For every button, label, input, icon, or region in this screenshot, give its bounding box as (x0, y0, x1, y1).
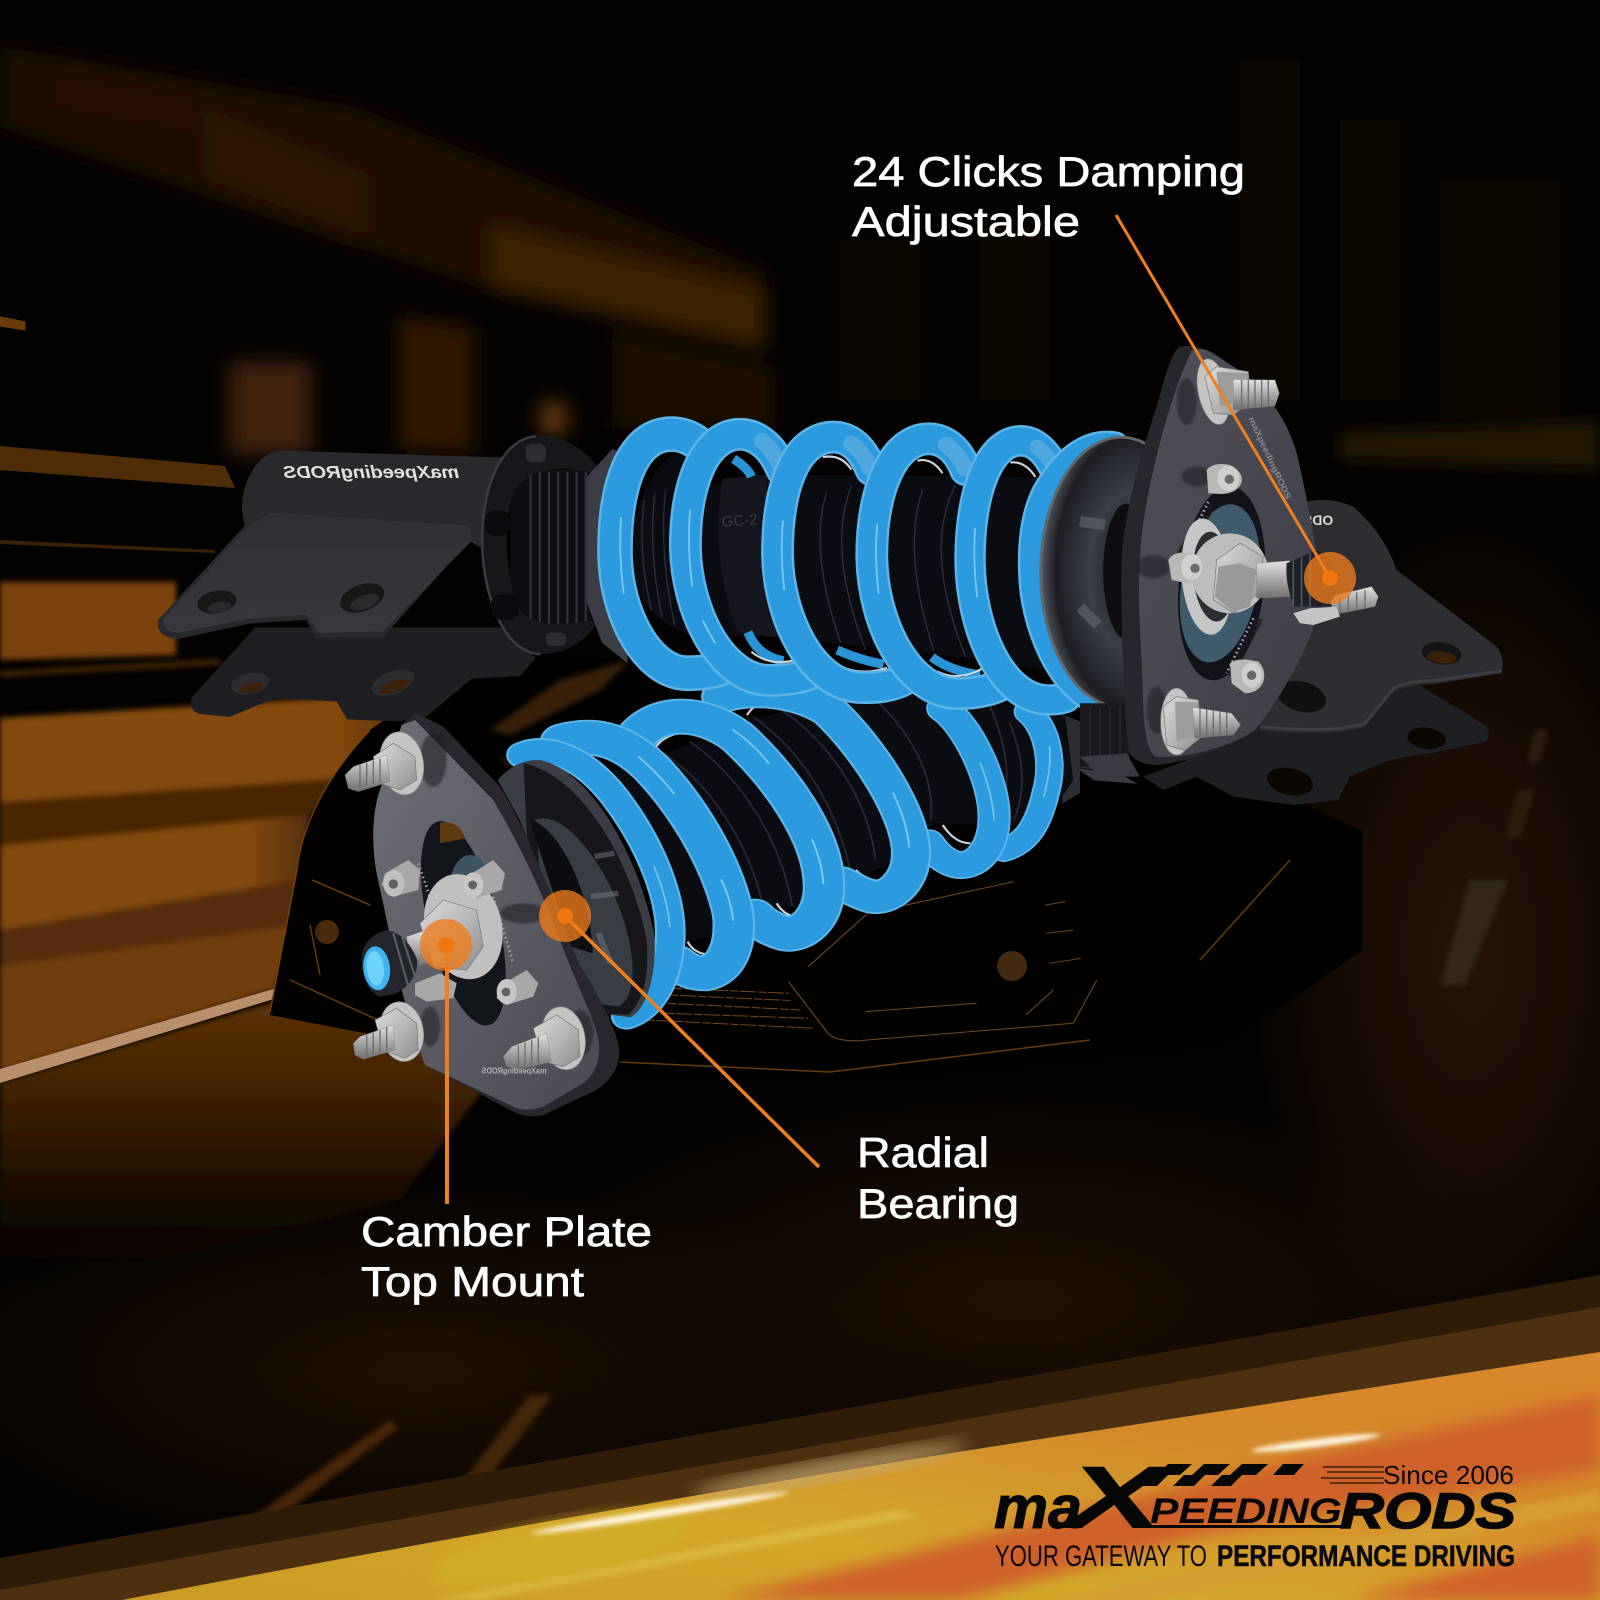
callout: camber plate top mount (361, 919, 652, 1305)
logo: tagline: PERFORMANCE DRIVING (1217, 1540, 1515, 1573)
upper spring coils (615, 434, 1123, 707)
center opening (1169, 482, 1274, 685)
upper coilover assembly (158, 346, 1378, 1116)
lower shock body (614, 693, 1073, 943)
car front grille stripes (646, 988, 814, 1028)
plate body (373, 713, 619, 1116)
large stud top (1192, 356, 1279, 427)
car left headlight outline (270, 730, 1290, 1072)
upper bracket lower flange (191, 628, 536, 721)
lower coilover assembly (rear) (498, 500, 1503, 1017)
threaded shock body (510, 469, 607, 628)
callout: radial bearing (539, 890, 1019, 1227)
lower spring threaded end near right plate (1080, 703, 1140, 777)
label: radial bearing: Radial (857, 1129, 989, 1176)
lower spring and shock body (498, 691, 1073, 1017)
small logo on plate: maXpeedingRODS (1246, 415, 1294, 501)
upper bracket (158, 436, 628, 721)
car outline details (788, 882, 1097, 1041)
bottom orange swoosh band (0, 1275, 1600, 1600)
logo: since 2006: Since 2006 (1383, 1460, 1514, 1490)
right side lower bracket (1143, 500, 1503, 805)
large stud bottom left (353, 998, 428, 1065)
large stud bottom right (503, 1003, 590, 1073)
left camber plate top mount (345, 713, 619, 1116)
plate bolt shadows (1137, 378, 1212, 733)
background: road surface left (0, 582, 520, 1300)
spherical bearing and nut (1177, 516, 1237, 637)
leader line and marker: camber plate (420, 919, 472, 1204)
upper shock body and spring (615, 434, 1201, 707)
plate bolt shadows (420, 733, 593, 1057)
car silhouette (270, 650, 1362, 1082)
background: stripe details left (0, 316, 235, 553)
logo: wordmark: RODS (1340, 1483, 1516, 1539)
back coil segments (734, 459, 980, 675)
background: light streaks (150, 1395, 552, 1600)
spring seat disc (1041, 437, 1201, 707)
background: blurred buildings left (0, 46, 776, 454)
large stud bottom (1161, 688, 1241, 755)
socket bolts (382, 860, 538, 1005)
right side upper bracket (1260, 500, 1503, 733)
silver gap rims (751, 456, 1035, 676)
lower spring coils (522, 691, 1050, 1017)
center opening (404, 813, 523, 1034)
lower shock threaded end (1062, 711, 1137, 804)
right camber plate top mount (1121, 346, 1378, 765)
silver gap rims (656, 698, 970, 955)
logo: checkered flag (1136, 1464, 1304, 1486)
callout: 24 clicks damping adjustable (852, 148, 1356, 604)
brand logo (994, 1447, 1516, 1573)
logo: wordmark: PEEDING (1150, 1492, 1342, 1531)
spring seat (587, 449, 628, 663)
logo: speed lines (1321, 1467, 1384, 1483)
logo: wordmark: X (1058, 1447, 1172, 1547)
label: radial bearing: Bearing (857, 1180, 1019, 1227)
lower spring seat disc (498, 760, 655, 1017)
logo: wordmark (994, 1447, 1516, 1547)
mirrored brand text on bracket: maXpeedingRODS (283, 462, 459, 482)
background: white lane line (0, 988, 277, 1083)
large stud top left (345, 728, 428, 798)
car hood reflections (490, 660, 640, 770)
leader line and marker: damping (1116, 215, 1356, 604)
damping knob (361, 930, 430, 997)
upper bracket main body (158, 451, 505, 639)
mark on shock body: GC-2 (721, 511, 758, 531)
leader line and marker: radial bearing (539, 890, 819, 1167)
brand mark on rear bracket: ODS (1303, 512, 1333, 528)
small logo on plate: maXpeedingRODS (481, 1065, 547, 1075)
label: 24 clicks damping: Adjustable (852, 198, 1080, 245)
adjusting collar (482, 436, 602, 654)
label: 24 clicks damping: 24 Clicks Damping (852, 148, 1245, 195)
bearing and nut (413, 866, 513, 988)
shock body (630, 450, 1051, 671)
logo: tagline (995, 1540, 1515, 1573)
logo: tagline: YOUR GATEWAY TO (995, 1540, 1207, 1573)
logo: wordmark: ma (994, 1474, 1082, 1541)
socket bolts (1168, 464, 1264, 693)
label: camber plate top mount: Top Mount (361, 1258, 584, 1305)
plate body (1121, 346, 1318, 765)
damping knob with stem (1257, 550, 1378, 625)
label: camber plate top mount: Camber Plate (361, 1208, 652, 1255)
